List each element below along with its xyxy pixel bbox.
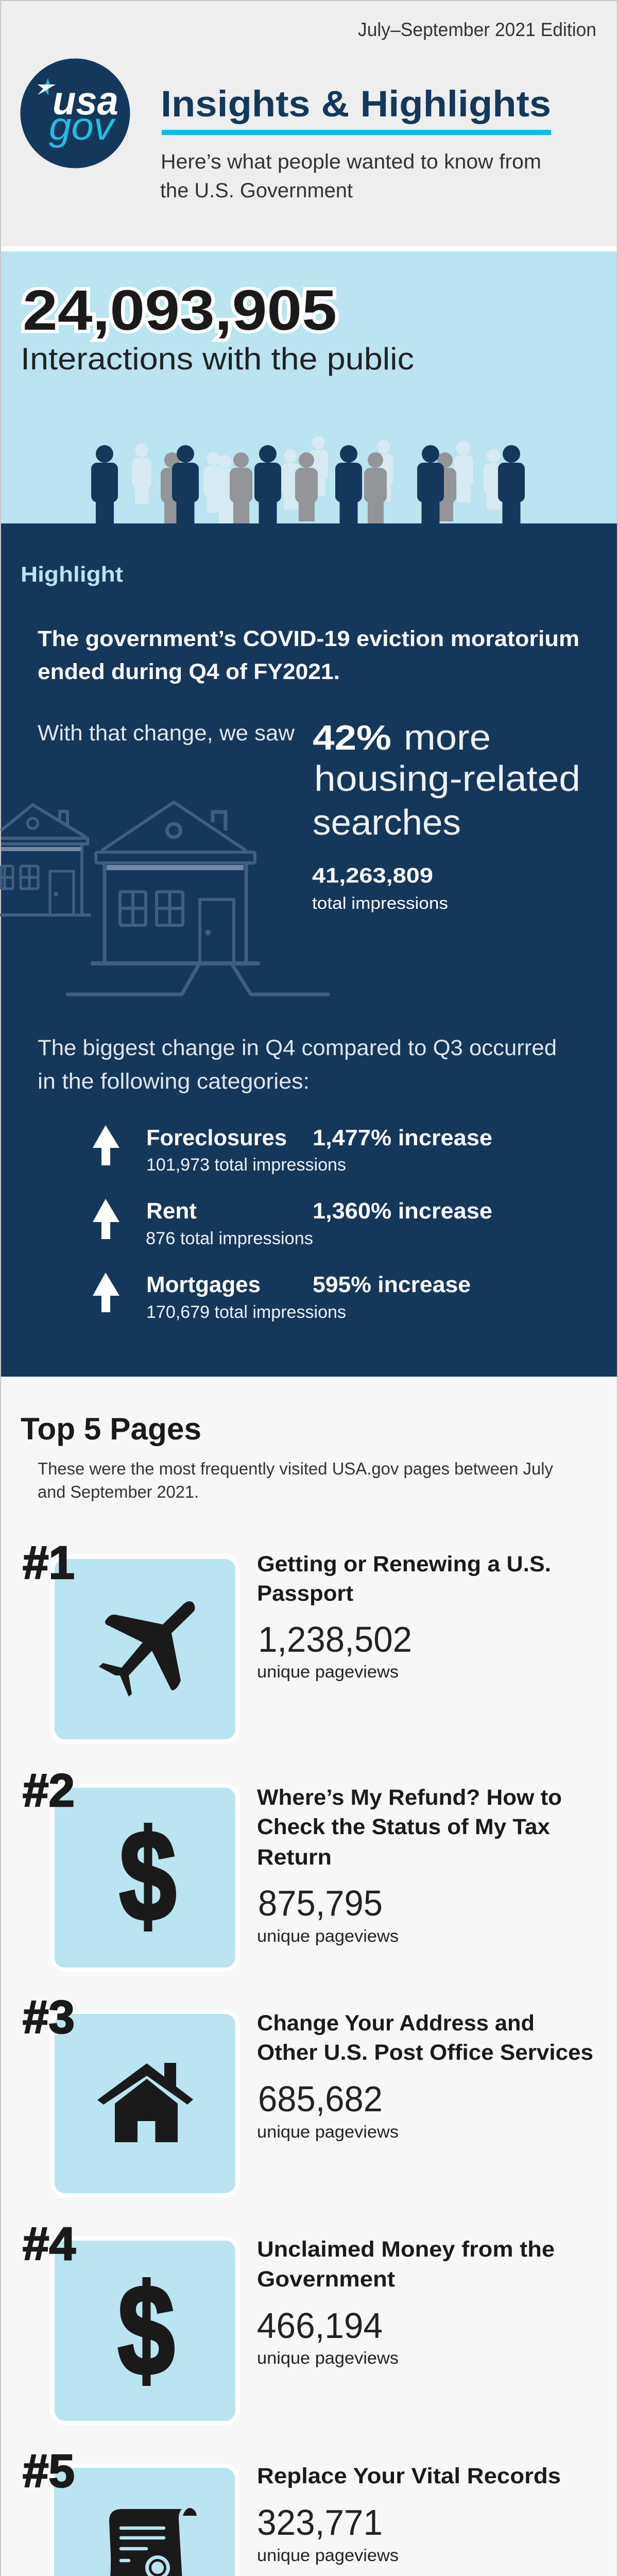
- page title: Government: [257, 2267, 395, 2292]
- subtitle: Here’s what people wanted to know from: [161, 150, 541, 173]
- pageviews: [257, 1619, 412, 1681]
- category: mortgages: Mortgages: [146, 1272, 261, 1297]
- category: rent: [93, 1198, 492, 1248]
- text: biggest change intro: in the following categories:: [38, 1069, 310, 1094]
- pageviews: unique pageviews: [257, 2546, 399, 2565]
- pageviews: 1,238,502: [258, 1619, 412, 1659]
- rank 2 item: [23, 1765, 562, 1970]
- subtitle: the U.S. Government: [160, 179, 353, 202]
- intro text: These were the most frequently visited USA.gov pages between July: [38, 1459, 553, 1478]
- icon: usa.gov logo: gov: [49, 105, 116, 148]
- page title: Other U.S. Post Office Services: [257, 2040, 593, 2065]
- category: foreclosures: 1,477% increase: [313, 1125, 492, 1150]
- caption: Interactions with the public: [21, 342, 414, 376]
- rank 3 item: [23, 1992, 593, 2195]
- page title: Return: [257, 1845, 332, 1870]
- page title: [257, 2237, 555, 2292]
- statistic: 42% more housing-related searches: [313, 717, 580, 842]
- icon: usa.gov logo: [21, 59, 130, 168]
- page title: Check the Status of My Tax: [257, 1815, 550, 1839]
- tile: [53, 2012, 237, 2195]
- statistic: 42% more housing-related searches: housing-related: [314, 758, 580, 799]
- headline: [38, 626, 579, 684]
- rank number: #5: [23, 2446, 75, 2497]
- title underline: [162, 130, 551, 135]
- category: rent: 876 total impressions: [146, 1229, 313, 1248]
- panel: header: [1, 1, 617, 251]
- category: foreclosures: Foreclosures: [146, 1125, 287, 1150]
- panel: top 5 pages: [1, 1377, 617, 2576]
- page title: Unclaimed Money from the: [257, 2237, 555, 2262]
- rank number: #4: [23, 2218, 76, 2270]
- statistic: total impressions: [312, 863, 448, 912]
- pageviews: 875,795: [258, 1883, 383, 1923]
- category: mortgages: [93, 1272, 471, 1322]
- pageviews: 466,194: [257, 2306, 383, 2346]
- big number: 24,093,905: [23, 279, 337, 342]
- rank number: #3: [23, 1992, 75, 2043]
- pageviews: 685,682: [258, 2079, 383, 2119]
- page title: Change Your Address and: [257, 2011, 535, 2036]
- panel: interactions: [1, 251, 617, 524]
- lead-in text: With that change, we saw: [38, 721, 295, 745]
- section label: Highlight: [21, 562, 123, 586]
- pageviews: unique pageviews: [257, 1926, 399, 1945]
- icon: house: [97, 2063, 193, 2142]
- intro text: [38, 1459, 553, 1501]
- category: rent: 1,360% increase: [313, 1198, 492, 1224]
- pageviews: [257, 2306, 399, 2367]
- rank number: #2: [23, 1765, 75, 1817]
- text: biggest change intro: [38, 1036, 557, 1094]
- icon: usa.gov logo: usa: [53, 78, 118, 123]
- pageviews: [257, 1883, 399, 1945]
- tile: [52, 2466, 237, 2576]
- text: biggest change intro: The biggest change in Q4 compared to Q3 occurred: [38, 1036, 557, 1060]
- pageviews: 323,771: [257, 2502, 383, 2543]
- icon: dollar sign: $: [119, 1804, 176, 1947]
- intro text: and September 2021.: [38, 1482, 199, 1501]
- icon: up arrow: [93, 1125, 119, 1165]
- rank 1 item: [23, 1537, 551, 1741]
- tile: [53, 2239, 237, 2423]
- page title: Passport: [257, 1581, 353, 1606]
- tile: [53, 1557, 237, 1741]
- pageviews: [257, 2502, 399, 2565]
- heading: Top 5 Pages: [21, 1412, 201, 1446]
- statistic: 42% more housing-related searches: more: [404, 717, 491, 757]
- page title: [257, 1785, 562, 1870]
- rank 5 item: [23, 2446, 561, 2576]
- statistic: 42% more housing-related searches: searches: [313, 802, 461, 842]
- category: rent: Rent: [146, 1198, 197, 1224]
- panel: highlight: [1, 523, 617, 1377]
- category: mortgages: 170,679 total impressions: [146, 1302, 346, 1322]
- pageviews: [257, 2079, 399, 2141]
- icon: up arrow: [93, 1273, 119, 1312]
- subtitle: [160, 150, 541, 202]
- icon: dollar sign: $: [118, 2258, 175, 2402]
- statistic: total impressions: 41,263,809: [312, 863, 433, 887]
- pageviews: unique pageviews: [257, 2348, 399, 2367]
- rank number: #1: [23, 1537, 75, 1589]
- page title: [257, 2011, 593, 2065]
- edition label: July–September 2021 Edition: [358, 19, 596, 40]
- page title: [257, 1552, 551, 1606]
- icon: up arrow: [93, 1199, 119, 1239]
- people illustration: [91, 436, 525, 524]
- category: foreclosures: 101,973 total impressions: [146, 1155, 346, 1175]
- page title: Where’s My Refund? How to: [257, 1785, 562, 1810]
- pageviews: unique pageviews: [257, 1662, 399, 1681]
- page title: Getting or Renewing a U.S.: [257, 1552, 551, 1577]
- category: foreclosures: [93, 1125, 492, 1175]
- icon: certificate scroll: [95, 2508, 197, 2576]
- page title: Replace Your Vital Records: [257, 2464, 561, 2488]
- icon: houses outline: [1, 802, 328, 994]
- headline: The government’s COVID-19 eviction moratorium: [38, 626, 579, 651]
- tile: [53, 1786, 237, 1970]
- statistic: 42% more housing-related searches: 42%: [313, 718, 391, 757]
- statistic: total impressions: total impressions: [312, 894, 448, 912]
- pageviews: unique pageviews: [257, 2122, 399, 2141]
- title: Insights & Highlights: [161, 84, 551, 125]
- rank 4 item: [23, 2218, 555, 2423]
- icon: airplane: [99, 1601, 195, 1697]
- headline: ended during Q4 of FY2021.: [38, 659, 340, 684]
- category: mortgages: 595% increase: [313, 1272, 471, 1297]
